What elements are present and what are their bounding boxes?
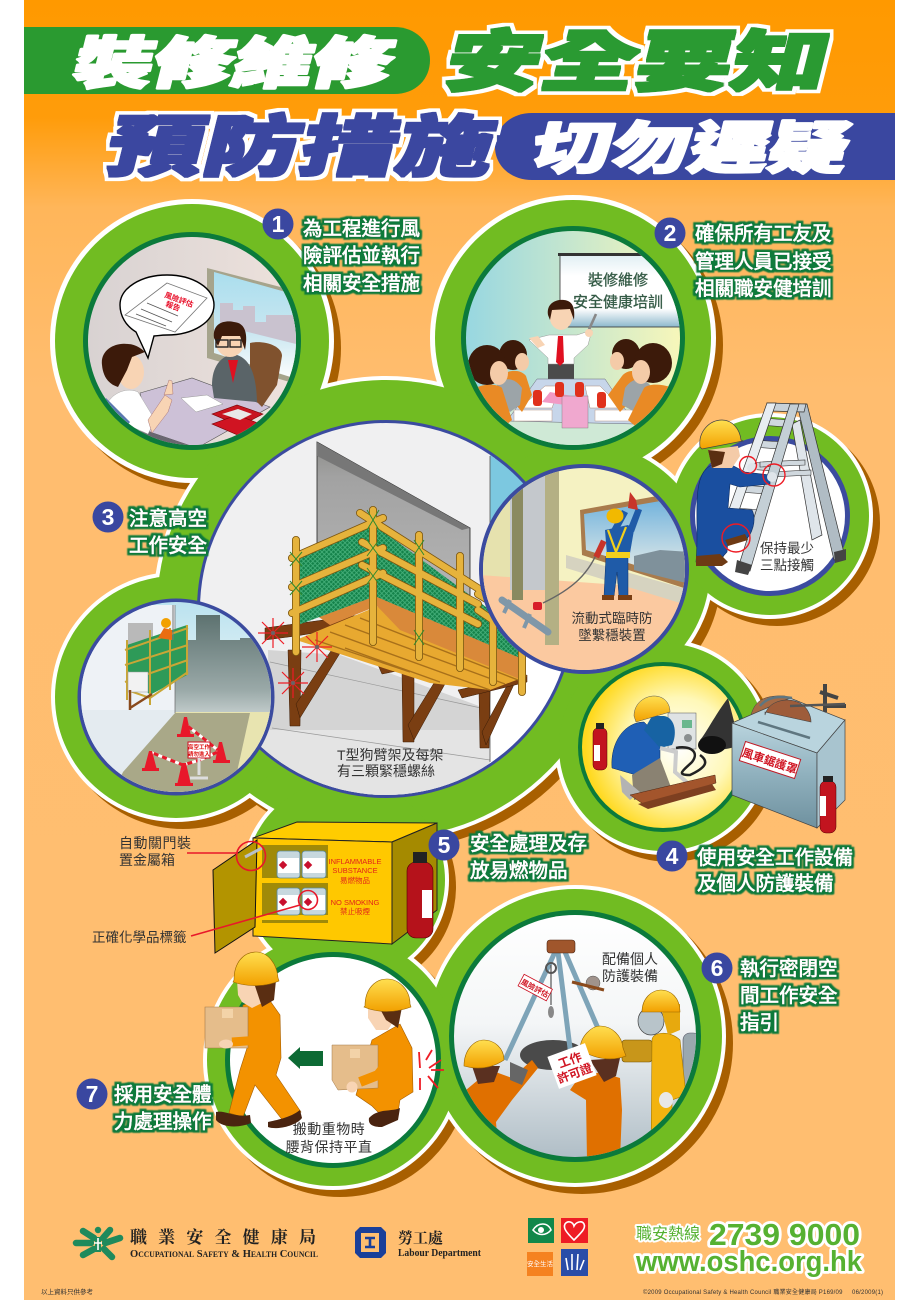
step 2 label: 相關職安健培訓 bbox=[695, 278, 832, 300]
caption: PPE bbox=[602, 951, 658, 984]
Labour Department name: 勞工處 bbox=[398, 1227, 443, 1248]
scene 2: safety training bbox=[460, 226, 690, 450]
disclaimer: 以上資料只供參考 bbox=[41, 1287, 94, 1296]
step 1 label: 1 bbox=[272, 211, 285, 237]
worker holding gas meter bbox=[464, 1040, 538, 1128]
attendees right bbox=[608, 339, 672, 426]
step 7 label: 採用安全體 bbox=[114, 1084, 212, 1106]
saw with guard bbox=[732, 684, 846, 833]
step 5 label: 安全處理及存 bbox=[470, 833, 587, 855]
caption: fall-arrest anchor: 墜繫穩裝置 bbox=[578, 628, 646, 643]
title: 安全要知: 安全要知 bbox=[437, 26, 838, 100]
traffic cones and sign: 高空工作 bbox=[188, 743, 210, 751]
step 1 label: 相關安全措施 bbox=[303, 273, 420, 295]
step 3 label bbox=[92, 502, 207, 557]
scene: ladder three points of contact bbox=[690, 403, 850, 596]
step 2 label: 管理人員已接受 bbox=[695, 251, 832, 273]
caption: T-bracket: 有三顆緊穩螺絲 bbox=[337, 763, 435, 779]
step 3 label: 3 bbox=[102, 504, 114, 530]
step 6 label: 間工作安全 bbox=[740, 985, 838, 1007]
step 4 label: 4 bbox=[666, 843, 679, 869]
worker climbing ladder bbox=[696, 420, 777, 566]
bamboo poles and rails bbox=[292, 510, 522, 692]
traffic cones and sign bbox=[142, 717, 230, 786]
hotline: 職安熱線 bbox=[636, 1225, 700, 1243]
title banner bbox=[24, 26, 895, 185]
step 5 label: 放易燃物品 bbox=[470, 860, 568, 882]
cabinet warning text: INFLAMMABLE bbox=[329, 857, 381, 866]
caption: PPE: 防護裝備 bbox=[602, 968, 658, 984]
callout: chemical label: 正確化學品標籤 bbox=[92, 929, 186, 945]
caption: back straight when moving heavy objects: 搬動重物時 bbox=[293, 1121, 365, 1137]
partner campaign icons: 安全生活 bbox=[527, 1259, 554, 1268]
bamboo platform bbox=[296, 606, 527, 690]
scene 5: flammable storage cabinet bbox=[92, 822, 437, 953]
scene 3: scaffold with T-brackets bbox=[195, 420, 580, 800]
white outline of the circles bbox=[50, 195, 873, 1190]
chemical tins bbox=[277, 851, 326, 915]
worker holding permit bbox=[570, 1026, 626, 1160]
blue title bar bbox=[495, 113, 895, 180]
scene 2: safety training: 安全健康培訓 bbox=[573, 294, 663, 311]
callout: self-closing door device bbox=[119, 835, 266, 870]
caption: PPE: 配備個人 bbox=[602, 951, 658, 967]
step 7 label: 7 bbox=[86, 1081, 98, 1107]
step 7 label bbox=[76, 1078, 212, 1133]
step 7 label: 力處理操作 bbox=[114, 1111, 212, 1133]
step 2 label: 2 bbox=[664, 220, 676, 246]
traffic cones and sign: 請勿進入 bbox=[188, 750, 210, 758]
step 5 label: 5 bbox=[438, 832, 451, 858]
step 1 label: 險評估並執行 bbox=[303, 245, 420, 267]
caption: T-bracket: T型狗臂架及每架 bbox=[337, 747, 444, 763]
hotline: 2739 9000 bbox=[709, 1217, 860, 1252]
brown T-brackets bbox=[265, 612, 527, 748]
anchor bolt bbox=[502, 600, 548, 632]
callout: self-closing door device: 置金屬箱 bbox=[119, 852, 175, 868]
step 1 label: 為工程進行風 bbox=[303, 218, 420, 240]
caption: three points of contact bbox=[760, 541, 814, 573]
red bolt highlights bbox=[258, 618, 332, 698]
step 6 label bbox=[702, 952, 838, 1034]
scene 1: risk assessment meeting bbox=[83, 232, 301, 455]
extinguisher bbox=[407, 852, 433, 938]
cabinet warning text bbox=[329, 857, 381, 916]
title: 預防措施: 預防措施 bbox=[99, 111, 504, 185]
green circles bbox=[55, 200, 869, 1186]
attendees left bbox=[468, 340, 532, 424]
speech bubble with report: 風險評估 bbox=[163, 289, 195, 309]
brown drop shadow of the circles bbox=[57, 202, 880, 1197]
OSHC logo bbox=[76, 1227, 120, 1257]
callout: self-closing door device: 自動關門裝 bbox=[119, 835, 192, 851]
hotline bbox=[635, 1217, 863, 1278]
caption: fall-arrest anchor: 流動式臨時防 bbox=[572, 611, 652, 626]
step 6 label: 6 bbox=[711, 955, 723, 981]
partner campaign icons bbox=[527, 1218, 588, 1276]
step 4 label bbox=[656, 840, 853, 895]
worker in breathing apparatus bbox=[622, 990, 696, 1130]
arrow bbox=[288, 1047, 323, 1069]
caption: fall-arrest anchor bbox=[572, 611, 652, 643]
OSHC name: Occupational Safety & Health Council bbox=[130, 1248, 318, 1260]
green title bar bbox=[24, 27, 430, 94]
caption: back straight when moving heavy objects bbox=[286, 1121, 372, 1155]
speech bubble with report bbox=[120, 275, 214, 358]
red contact-point circles bbox=[722, 456, 785, 552]
Labour Department logo bbox=[355, 1227, 386, 1258]
step 2 label bbox=[654, 218, 832, 300]
worker carrying box bbox=[205, 952, 302, 1128]
work permit card bbox=[547, 1043, 597, 1089]
aluminium ladder bbox=[712, 403, 846, 575]
steel I-beam bbox=[630, 775, 716, 809]
scene 4: welding and saw guard bbox=[578, 662, 750, 832]
work permit card: 許可證 bbox=[555, 1060, 594, 1086]
red strain lines bbox=[419, 1050, 444, 1090]
cabinet warning text: NO SMOKING bbox=[331, 898, 380, 907]
gondola scaffold bbox=[125, 605, 188, 710]
scene: gondola and barricade bbox=[78, 598, 278, 802]
saw guard label: 風車鋸護罩 bbox=[740, 745, 799, 776]
copyright line: ©2009 Occupational Safety & Health Council 職業安全健康局 P169/09 06/2009(1) bbox=[643, 1288, 883, 1296]
scene 6: confined space work bbox=[449, 910, 701, 1170]
hotline: www.oshc.org.hk bbox=[635, 1246, 863, 1278]
title: 裝修維修: 裝修維修 bbox=[67, 34, 400, 96]
cabinet door bbox=[213, 840, 257, 953]
worker with harness bbox=[602, 492, 642, 600]
tripod and manhole: 風險評估 bbox=[519, 977, 551, 1000]
caption: back straight when moving heavy objects: 腰背保持平直 bbox=[286, 1139, 372, 1155]
step 6 label: 指引 bbox=[740, 1012, 779, 1034]
step 6 label: 執行密閉空 bbox=[740, 958, 838, 980]
scene 7: manual handling bbox=[205, 952, 444, 1168]
speech bubble with report: 報告 bbox=[164, 298, 182, 313]
step 3 label: 工作安全 bbox=[129, 535, 207, 557]
scene 2: safety training: 裝修維修 bbox=[588, 272, 648, 289]
scene: mobile fall-arrest anchor bbox=[479, 464, 690, 680]
cabinet warning text: SUBSTANCE bbox=[332, 866, 378, 875]
caption: three points of contact: 三點接觸 bbox=[760, 557, 814, 573]
callout: chemical label bbox=[92, 890, 318, 945]
footer bbox=[41, 1217, 883, 1296]
worker crouching with box bbox=[332, 979, 413, 1127]
saw extinguisher bbox=[820, 776, 836, 833]
step 3 label: 注意高空 bbox=[129, 508, 207, 530]
Labour Department name: Labour Department bbox=[398, 1248, 481, 1259]
step 1 label bbox=[262, 208, 420, 295]
step 2 label: 確保所有工友及 bbox=[695, 223, 832, 245]
welder bbox=[612, 696, 705, 800]
welder's extinguisher bbox=[593, 723, 607, 770]
green safety net bbox=[298, 527, 373, 625]
cabinet warning text: 易燃物品 bbox=[340, 875, 370, 885]
Labour Department name bbox=[398, 1227, 481, 1259]
cabinet warning text: 禁止吸煙 bbox=[340, 906, 370, 916]
caption: T-bracket bbox=[337, 747, 444, 779]
work permit card: 工作 bbox=[556, 1049, 584, 1071]
caption: three points of contact: 保持最少 bbox=[760, 541, 814, 556]
step 4 label: 及個人防護裝備 bbox=[697, 873, 834, 895]
OSHC name: 職業安全健康局 bbox=[130, 1223, 316, 1248]
step 4 label: 使用安全工作設備 bbox=[697, 847, 853, 869]
step 5 label bbox=[428, 830, 587, 882]
tripod and manhole bbox=[505, 940, 604, 1080]
title: 切勿遲疑: 切勿遲疑 bbox=[525, 119, 856, 181]
OSHC name bbox=[130, 1223, 318, 1260]
